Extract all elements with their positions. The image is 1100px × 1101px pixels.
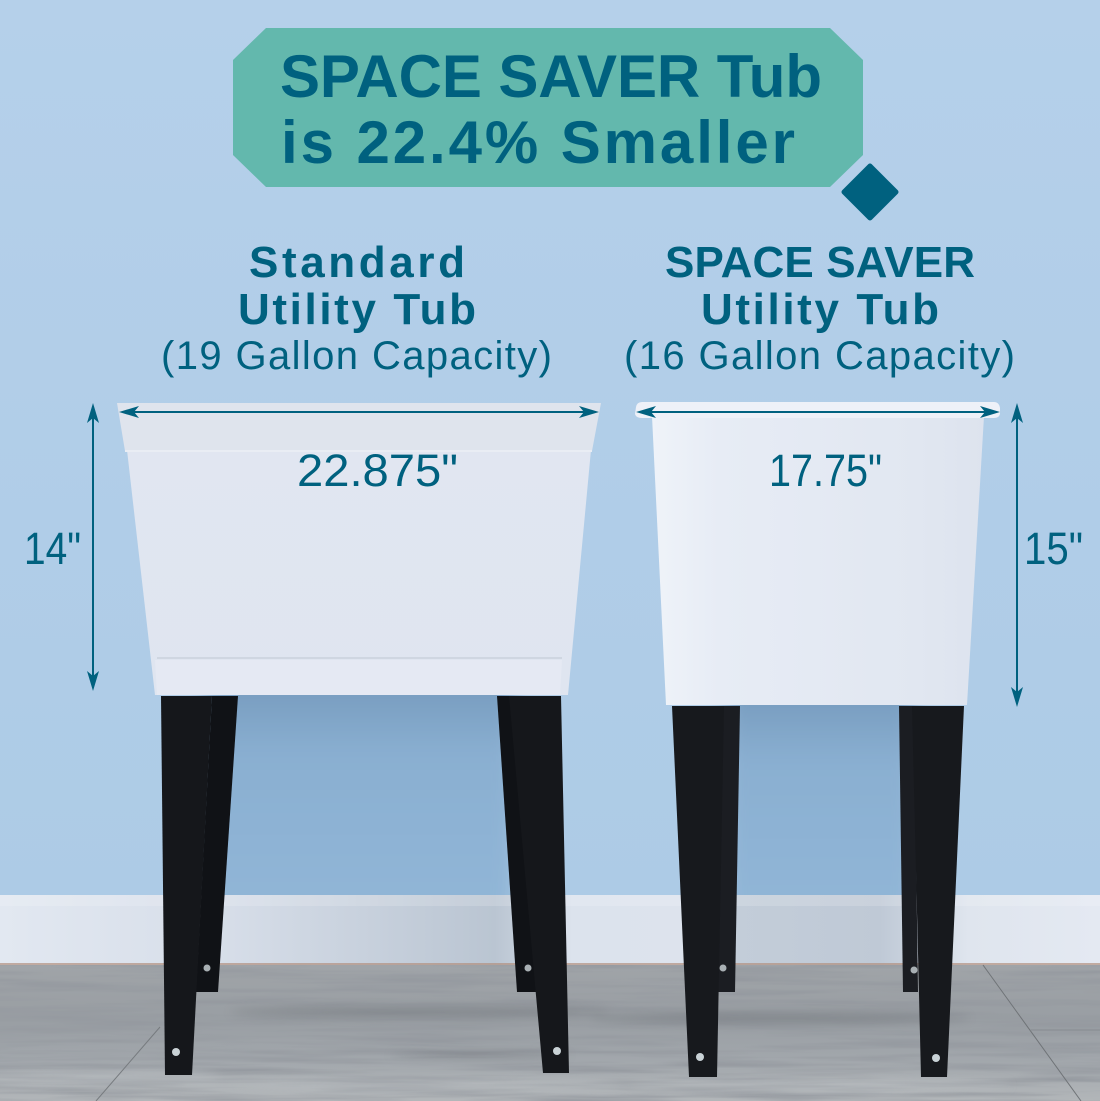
rear left leg <box>196 696 238 992</box>
heading: standard tub: Standard <box>249 238 465 287</box>
standard tub body <box>117 403 601 695</box>
space saver tub body <box>635 402 1000 705</box>
heading: space saver tub: SPACE SAVER <box>665 238 975 287</box>
heading: standard tub <box>161 238 552 378</box>
baseboard <box>0 895 1100 965</box>
rear right leg <box>497 696 536 992</box>
arrow: space saver width <box>636 406 1000 418</box>
shadow on wall under tubs <box>196 695 924 895</box>
diamond accent <box>844 166 896 218</box>
tub rim <box>117 403 601 451</box>
heading: standard tub: Utility Tub <box>238 285 476 334</box>
arrow: space saver height <box>1011 403 1023 707</box>
tub rim <box>635 402 1000 418</box>
label: standard height: 14" <box>24 523 81 574</box>
label: space saver width: 17.75" <box>769 445 882 496</box>
label: space saver height: 15" <box>1024 523 1083 574</box>
arrow: standard width <box>119 406 599 418</box>
front right leg <box>912 706 964 1077</box>
front left leg <box>672 706 724 1077</box>
heading: standard tub: (19 Gallon Capacity) <box>161 334 552 378</box>
bottom band <box>155 660 562 695</box>
space saver tub legs <box>672 706 964 1077</box>
heading: space saver tub: Utility Tub <box>701 285 939 334</box>
headline banner <box>233 28 863 187</box>
front right leg <box>509 696 569 1073</box>
heading: space saver tub <box>624 238 1015 378</box>
headline text: SPACE SAVER Tub <box>280 43 822 110</box>
heading: space saver tub: (16 Gallon Capacity) <box>624 334 1015 378</box>
rear right leg <box>899 706 918 992</box>
label: standard width: 22.875" <box>297 445 458 496</box>
wood floor <box>0 963 1100 1101</box>
headline banner: is 22.4% Smaller <box>281 109 795 176</box>
arrow: standard height <box>87 403 99 691</box>
front left leg <box>161 696 212 1075</box>
rear left leg <box>718 706 740 992</box>
standard tub legs <box>161 696 569 1075</box>
